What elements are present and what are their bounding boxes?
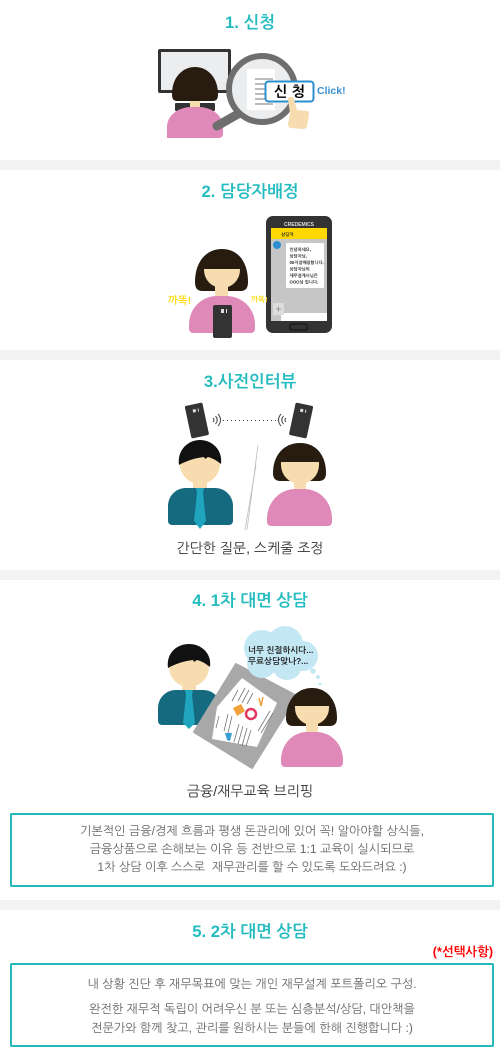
icon: smartphone with chat: 상담자님의 <box>290 266 310 272</box>
icon: woman client <box>281 688 343 767</box>
icon: smartphone with chat <box>266 216 332 333</box>
panel: step 5 description: 완전한 재무적 독립이 어려우신 분 또는 심층분석/상담, 대안책을 <box>89 1002 415 1016</box>
divider: separation line <box>245 445 258 530</box>
icon: smartphone with chat: CREDEMICS <box>284 222 315 228</box>
icon: monitor <box>158 49 231 111</box>
icon: signal between phones <box>213 414 286 426</box>
button: apply <box>266 82 314 102</box>
illustration: applying at a computer <box>158 49 346 138</box>
caption: step 4: 금융/재무교육 브리핑 <box>187 783 313 799</box>
icon: right phone <box>289 403 313 439</box>
icon: male consultant <box>158 644 221 729</box>
icon: smartphone with chat: 상담자 <box>281 232 294 237</box>
panel: step 4 description <box>10 813 494 887</box>
label: click: Click! <box>317 85 346 97</box>
button: apply: 신 청 <box>274 84 305 100</box>
icon: smartphone with chat: 안녕하세요, <box>290 247 311 252</box>
icon: smartphone with chat: OOO님 입니다. <box>290 280 318 284</box>
note: optional: (*선택사항) <box>433 945 493 959</box>
icon: pointing hand <box>288 97 309 129</box>
icon: thought cloud <box>244 626 322 686</box>
icon: smartphone with chat: 상담자님, <box>290 254 307 258</box>
illustration: phone interview <box>168 403 332 530</box>
heading: step 5: 5. 2차 대면 상담 <box>192 922 308 941</box>
icon: male consultant <box>168 440 233 529</box>
icon: woman holding phone <box>189 249 255 338</box>
panel: step 4 description: 금융상품으로 손해보는 이유 등 전반으로 1:1 교육이 실시되므로 <box>90 842 414 856</box>
heading: step 3: 3.사전인터뷰 <box>204 372 296 391</box>
panel: step 5 description: 전문가와 함께 찾고, 관리를 원하시는 분들에 한해 진행합니다 :) <box>91 1021 413 1035</box>
icon: magnifier <box>217 56 295 126</box>
panel: step 4 description: 1차 상담 이후 스스로 재무관리를 할 수 있도록 도와드려요 :) <box>97 860 407 874</box>
icon: smartphone with chat: 재무설계사님은 <box>290 273 318 278</box>
illustration: manager assigned by messenger <box>168 216 332 338</box>
icon: thought cloud: 너무 친절하시다... <box>248 645 313 655</box>
icon: woman from behind <box>167 67 223 138</box>
label: ding left: 까똑! <box>168 295 191 307</box>
label: ding right: 까똑! <box>251 295 268 304</box>
icon: woman client <box>267 443 332 526</box>
panel: step 5 description: 내 상황 진단 후 재무목표에 맞는 개인 재무설계 포트폴리오 구성. <box>87 977 417 991</box>
illustration: first meeting <box>158 626 343 768</box>
icon: smartphone with chat: 00지점배정합니다. <box>290 260 324 265</box>
heading: step 2: 2. 담당자배정 <box>202 182 298 201</box>
heading: step 1: 1. 신청 <box>225 13 275 32</box>
icon: thought cloud: 무료상담맞나?... <box>248 656 308 666</box>
icon: clipboard with documents <box>194 664 297 768</box>
panel: step 4 description: 기본적인 금융/경제 흐름과 평생 돈관리에 있어 꼭! 알아야할 상식들, <box>80 824 424 838</box>
heading: step 4: 4. 1차 대면 상담 <box>192 591 308 610</box>
icon: left phone <box>185 403 209 439</box>
caption: step 3: 간단한 질문, 스케줄 조정 <box>176 540 324 556</box>
panel: step 5 description <box>10 963 494 1047</box>
